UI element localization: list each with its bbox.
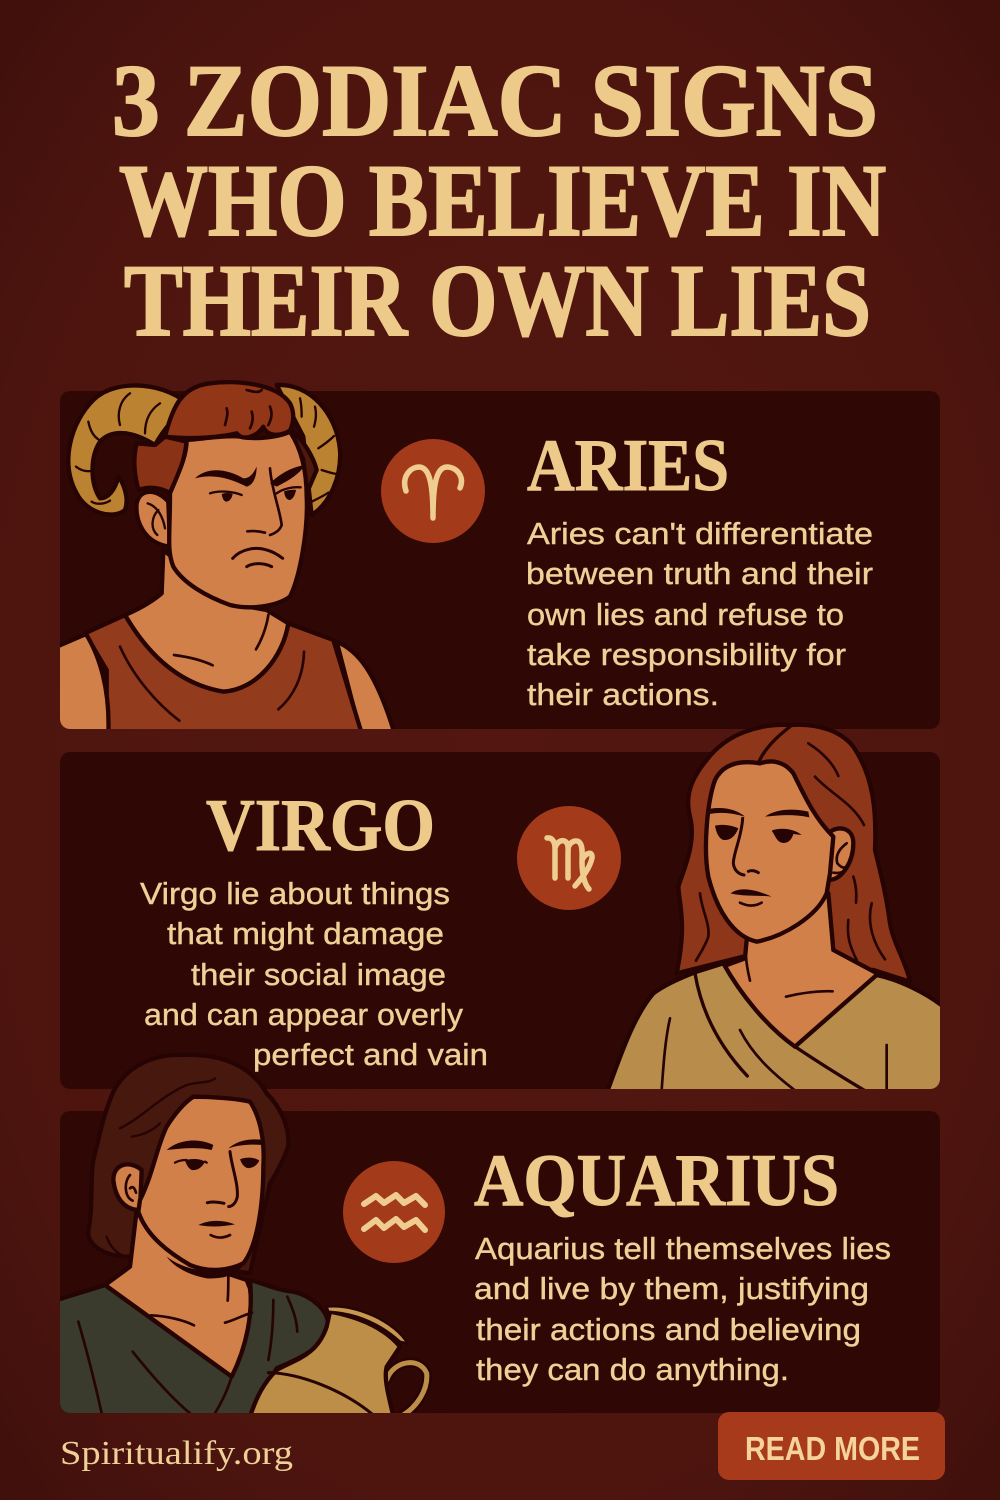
heading: Aquarius: AQUARIUS: [474, 1140, 839, 1222]
button: read more: READ MORE: [745, 1430, 920, 1467]
text: Aquarius description: their actions and believing: [476, 1312, 861, 1347]
text: Virgo description: Virgo lie about things: [140, 876, 450, 911]
text: Aquarius description: Aquarius tell themselves lies: [475, 1231, 891, 1266]
text: Virgo description: perfect and vain: [253, 1037, 488, 1072]
text: Aquarius description: [474, 1231, 891, 1387]
panel: Aquarius: [57, 1055, 940, 1417]
icon: Aries symbol: [381, 439, 485, 543]
illustration: Aries man with ram horns: [57, 382, 394, 733]
text: Virgo description: their social image: [191, 957, 446, 992]
title: [112, 44, 886, 358]
panel: Virgo: [60, 725, 943, 1093]
text: Aries description: Aries can't differentiate: [527, 516, 873, 551]
text: Aries description: their actions.: [527, 677, 719, 712]
text: Virgo description: [140, 876, 488, 1072]
illustration: Aquarius man with water jug: [57, 1055, 427, 1417]
text: Aries description: between truth and their: [526, 556, 873, 591]
icon: Virgo symbol: [517, 806, 621, 910]
icon: Aquarius symbol: [343, 1161, 445, 1263]
title: 3 ZODIAC SIGNS: [112, 44, 878, 158]
text: Aries description: [526, 516, 873, 712]
illustration: Virgo woman: [607, 725, 943, 1093]
text: Aquarius description: and live by them, justifying: [474, 1271, 869, 1306]
title: WHO BELIEVE IN: [119, 144, 886, 258]
footer brand: Spiritualify.org: [60, 1435, 293, 1472]
heading: Virgo: VIRGO: [206, 785, 435, 867]
text: Aries description: take responsibility for: [527, 637, 846, 672]
text: Aquarius description: they can do anything.: [476, 1352, 789, 1387]
text: Virgo description: that might damage: [167, 916, 444, 951]
text: Virgo description: and can appear overly: [144, 997, 464, 1032]
panel: Aries: [57, 382, 940, 733]
text: Aries description: own lies and refuse to: [527, 597, 844, 632]
button: read more: [718, 1412, 945, 1480]
heading: Aries: ARIES: [527, 425, 729, 507]
title: THEIR OWN LIES: [124, 244, 871, 358]
